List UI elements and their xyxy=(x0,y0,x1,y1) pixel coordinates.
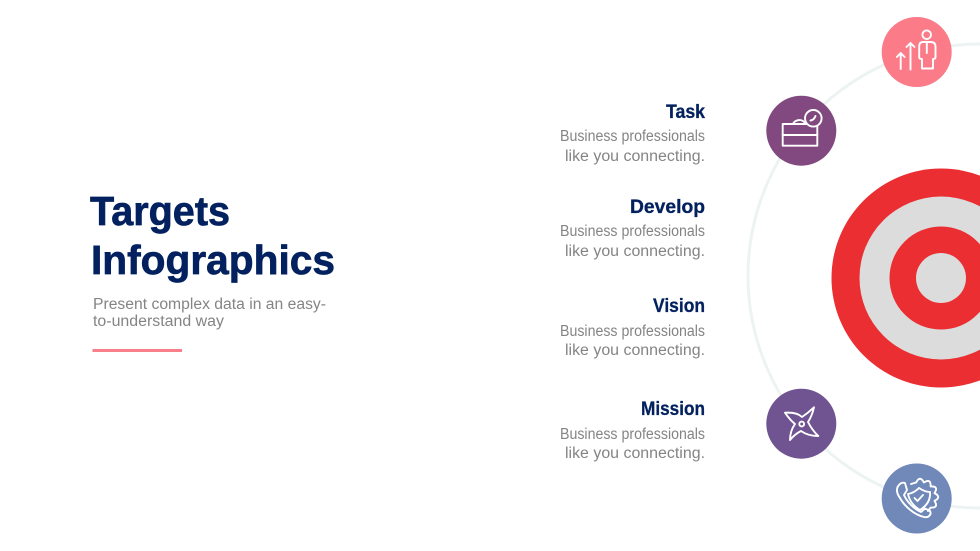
text block: Task: Task xyxy=(666,102,705,123)
title xyxy=(90,188,335,283)
text block: Vision: Business professionals xyxy=(560,323,705,340)
icon: phone gear with check xyxy=(882,464,952,534)
subtitle xyxy=(93,296,326,330)
icon: person with rising arrows xyxy=(882,17,952,87)
text block: Task xyxy=(560,102,705,165)
subtitle: Present complex data in an easy- xyxy=(93,296,326,313)
text block: Mission: Mission xyxy=(641,399,705,420)
text block: Task: like you connecting. xyxy=(565,148,705,165)
text block: Mission: Business professionals xyxy=(560,426,705,443)
text block: Vision xyxy=(560,296,705,359)
title: Targets xyxy=(90,188,230,234)
text block: Develop: like you connecting. xyxy=(565,243,705,260)
icon: cake with clock xyxy=(766,96,836,166)
text block: Develop: Develop xyxy=(630,197,705,218)
accent underline xyxy=(92,349,182,352)
text block: Mission xyxy=(560,399,705,462)
icon: shuriken star xyxy=(766,389,836,459)
subtitle: to-understand way xyxy=(93,313,224,330)
text block: Mission: like you connecting. xyxy=(565,445,705,462)
text block: Develop: Business professionals xyxy=(560,223,705,240)
text block: Vision: Vision xyxy=(653,296,705,317)
text block: Vision: like you connecting. xyxy=(565,342,705,359)
target bullseye xyxy=(832,168,980,388)
text block: Task: Business professionals xyxy=(560,128,705,145)
title: Infographics xyxy=(91,237,335,283)
text block: Develop xyxy=(560,197,705,260)
